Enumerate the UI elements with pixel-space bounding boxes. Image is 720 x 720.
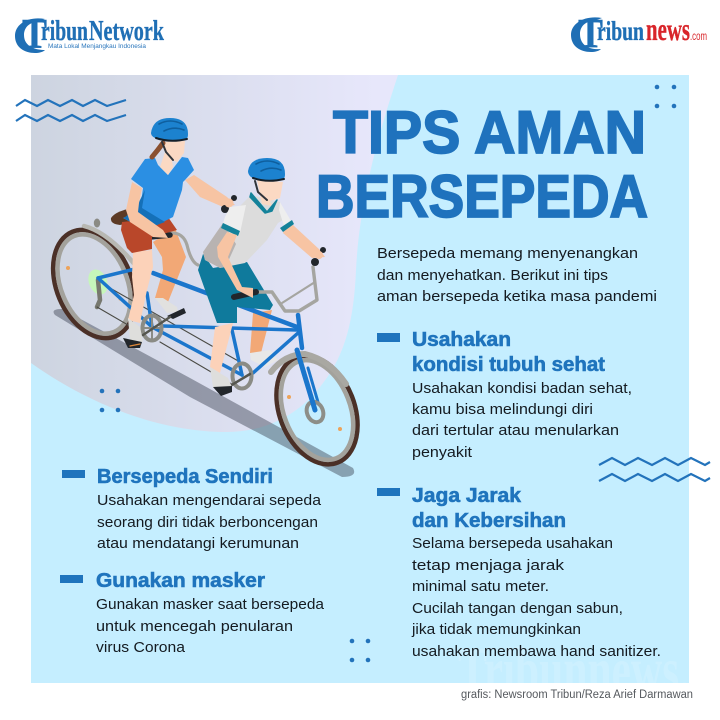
intro text: Bersepeda memang menyenangkan	[377, 245, 638, 262]
front handlebar	[234, 247, 326, 311]
rear handlebar	[150, 233, 198, 265]
frame	[98, 269, 318, 402]
heading: Bersepeda Sendiri	[97, 466, 273, 488]
woman: helmet	[151, 118, 188, 141]
ground shadow	[54, 309, 354, 477]
logo: TribunNetwork: ribun	[41, 16, 88, 47]
rear wheel	[38, 217, 150, 351]
body text: tetap menjaga jarak	[412, 557, 565, 574]
body text: Gunakan masker saat bersepeda	[96, 596, 325, 613]
woman: back arm to man's shoulder	[185, 175, 235, 207]
body text: jika tidak memungkinkan	[411, 621, 581, 638]
man: shorts	[198, 254, 273, 323]
saddle	[111, 209, 133, 225]
bullet bar	[62, 470, 85, 478]
man: near shoe and pedal	[210, 367, 232, 396]
zigzag decoration: right	[599, 458, 710, 481]
panel: light blue background	[31, 75, 689, 683]
heading	[412, 485, 566, 532]
man: neck and face	[257, 180, 283, 206]
logo: Tribunnews.com: .com	[690, 29, 707, 43]
logo: Tribunnews.com: news	[646, 11, 690, 47]
body text: dari tertular atau menularkan	[412, 422, 619, 439]
intro text: aman bersepeda ketika masa pandemi	[377, 288, 657, 305]
body text: penyakit	[412, 444, 473, 461]
body text: untuk mencegah penularan	[96, 618, 293, 635]
section: Gunakan masker	[60, 570, 325, 656]
man: near leg	[210, 323, 233, 373]
front wheel	[261, 344, 373, 476]
section: Bersepeda Sendiri	[62, 466, 322, 552]
logo: Tribunnews.com: T	[578, 10, 603, 56]
body text: Selama bersepeda usahakan	[412, 535, 613, 552]
woman: near shoe and pedal	[123, 318, 143, 348]
man: hand rests, glove blobs	[221, 195, 237, 213]
woman: shirt	[123, 157, 194, 227]
dots decoration: top right	[655, 85, 676, 108]
heading: Gunakan masker	[96, 570, 265, 592]
dots decoration: bottom	[350, 639, 370, 662]
section: Usahakan kondisi tubuh sehat	[377, 329, 632, 461]
body text: atau mendatangi kerumunan	[97, 535, 299, 552]
section: Jaga Jarak dan Kebersihan	[377, 485, 661, 660]
intro text	[377, 245, 657, 305]
far leg: woman	[153, 228, 186, 302]
title: TIPS AMAN	[333, 99, 646, 166]
credit line: grafis: Newsroom Tribun/Reza Arief Darmawan	[461, 689, 693, 701]
man: helmet strap	[255, 181, 267, 200]
chain	[97, 284, 240, 386]
logo: TribunNetwork	[15, 12, 165, 58]
heading: kondisi tubuh sehat	[412, 354, 605, 376]
man: far arm	[283, 225, 325, 258]
far shoe and pedal: woman	[155, 298, 186, 319]
body text	[411, 535, 661, 660]
man: shirt	[203, 195, 294, 268]
body text: Usahakan mengendarai sepeda	[97, 492, 322, 509]
dots decoration: under bicycle	[100, 389, 120, 412]
logo: TribunNetwork: Mata Lokal Menjangkau Indonesia	[48, 43, 146, 50]
body text: kamu bisa melindungi diri	[412, 401, 593, 418]
body text: Cucilah tangan dengan sabun,	[412, 600, 623, 617]
body text: Usahakan kondisi badan sehat,	[412, 380, 632, 397]
man: helmet	[248, 158, 285, 181]
logo: TribunNetwork: T	[22, 12, 47, 58]
zigzag decoration: top left	[16, 100, 126, 121]
heading: dan Kebersihan	[412, 510, 566, 532]
far shoe: man	[250, 350, 278, 367]
heading	[412, 329, 605, 376]
body text: usahakan membawa hand sanitizer.	[412, 643, 661, 660]
woman: shorts	[121, 217, 177, 253]
woman: neck and face	[160, 141, 185, 175]
body text: minimal satu meter.	[412, 578, 549, 595]
body text	[97, 492, 322, 552]
bullet bar	[377, 333, 400, 342]
heading: Jaga Jarak	[412, 485, 522, 507]
bullet bar	[60, 575, 83, 583]
heading: Usahakan	[412, 329, 511, 351]
body text: seorang diri tidak berboncengan	[97, 514, 318, 531]
man: collar	[250, 193, 277, 213]
body text: virus Corona	[96, 639, 186, 656]
chainring: front	[230, 364, 252, 388]
woman: near arm	[126, 182, 168, 238]
logo: Tribunnews.com: ribun	[597, 16, 644, 46]
logo: TribunNetwork: Network	[89, 15, 165, 47]
illustration: tandem bicycle with two riders	[38, 118, 373, 477]
body text	[96, 596, 325, 656]
title: BERSEPEDA	[316, 163, 648, 230]
body text	[412, 380, 632, 461]
logo: Tribunnews.com	[571, 10, 707, 56]
bullet bar	[377, 488, 400, 496]
chainring: rear	[142, 315, 170, 341]
woman: hair and helmet strap	[152, 142, 173, 160]
title	[316, 99, 648, 230]
far leg: man	[250, 310, 272, 357]
intro text: dan menyehatkan. Berikut ini tips	[377, 267, 608, 284]
woman: near leg	[128, 250, 153, 323]
man: near arm	[217, 232, 253, 298]
